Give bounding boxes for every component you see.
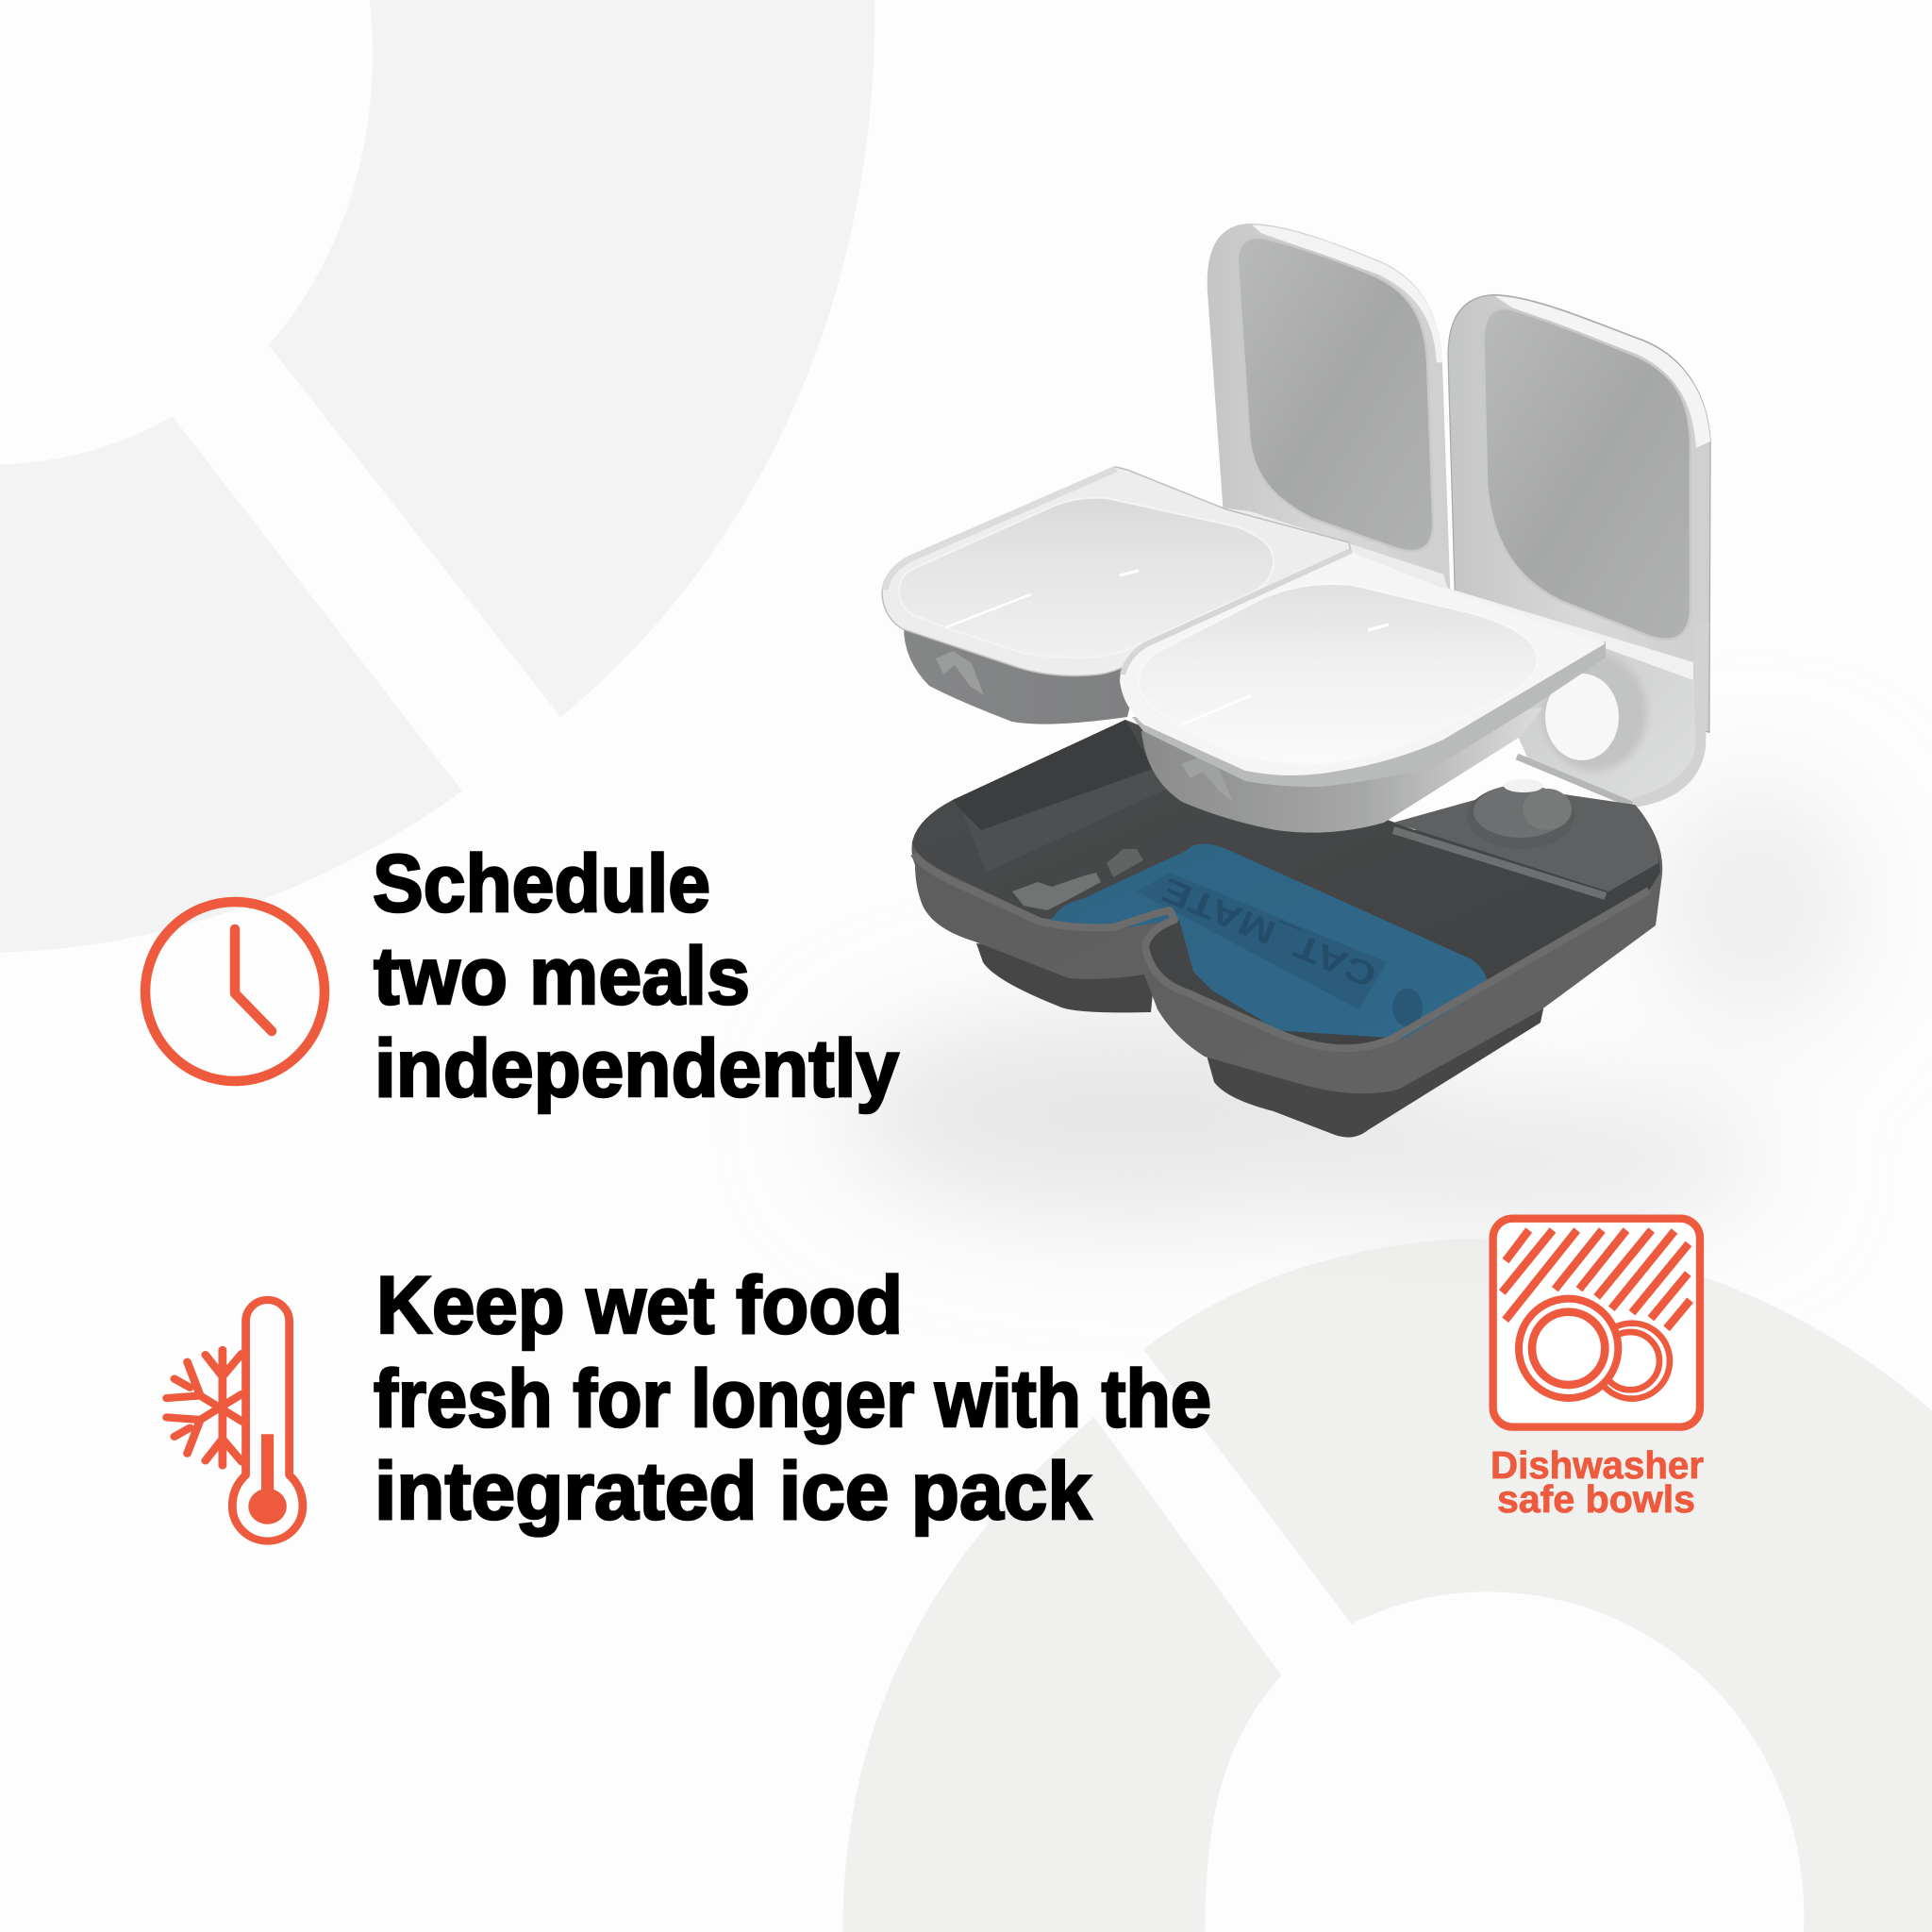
plate top bbox=[1120, 552, 1606, 775]
small fittings bbox=[1012, 849, 1143, 910]
text: keep wet food fresh: integrated ice pack bbox=[375, 1446, 1091, 1537]
icon: clock bbox=[145, 902, 325, 1081]
underside bbox=[904, 627, 1141, 724]
text: schedule two meals independently: two meals bbox=[374, 931, 750, 1022]
text: schedule two meals independently bbox=[373, 839, 899, 1114]
plate bbox=[882, 467, 1351, 675]
dial knob bbox=[1467, 779, 1574, 849]
label: safe bowls bbox=[1497, 1477, 1695, 1521]
bowl cavity bbox=[1139, 584, 1538, 764]
text: schedule two meals independently: independently bbox=[375, 1024, 899, 1114]
bowl cavity bbox=[899, 498, 1274, 658]
label bbox=[1491, 1443, 1704, 1521]
shelf bbox=[1393, 788, 1658, 891]
front bowl bbox=[1120, 551, 1606, 833]
tray rim bbox=[914, 854, 1649, 1048]
text: keep wet food fresh: Keep wet food bbox=[376, 1260, 903, 1351]
soft floor shadow bbox=[840, 783, 1858, 1226]
back lid right bbox=[1448, 295, 1710, 732]
product: open feeder with ice pack bbox=[882, 224, 1710, 1138]
underside bbox=[1141, 708, 1542, 833]
icon: dishwasher plates bbox=[1493, 1219, 1700, 1427]
tray feet bbox=[976, 943, 1156, 1012]
text: schedule two meals independently: Schedule bbox=[373, 839, 710, 929]
feature 1: schedule meals bbox=[145, 839, 899, 1114]
text: keep wet food fresh: fresh for longer with the bbox=[374, 1354, 1211, 1444]
tray interior bbox=[912, 720, 1660, 1051]
base tray bbox=[911, 720, 1662, 1138]
tray outer wall bbox=[911, 720, 1662, 1093]
lid lower part with finger hole bbox=[1443, 587, 1709, 808]
badge: dishwasher safe bowls bbox=[1491, 1219, 1704, 1521]
ice pack bbox=[1041, 843, 1487, 1039]
plate side bbox=[1132, 641, 1606, 787]
ice pack: CAT_MATE bbox=[1156, 871, 1382, 995]
clip bbox=[936, 651, 984, 695]
label: Dishwasher bbox=[1491, 1443, 1704, 1487]
clip bbox=[1181, 758, 1233, 802]
icon: thermometer with snowflake bbox=[167, 1300, 303, 1541]
text: keep wet food fresh bbox=[374, 1260, 1211, 1537]
left bowl bbox=[882, 467, 1351, 724]
back lids bbox=[1208, 224, 1710, 808]
feature 2: ice pack bbox=[167, 1260, 1211, 1541]
back lid left bbox=[1208, 224, 1450, 593]
